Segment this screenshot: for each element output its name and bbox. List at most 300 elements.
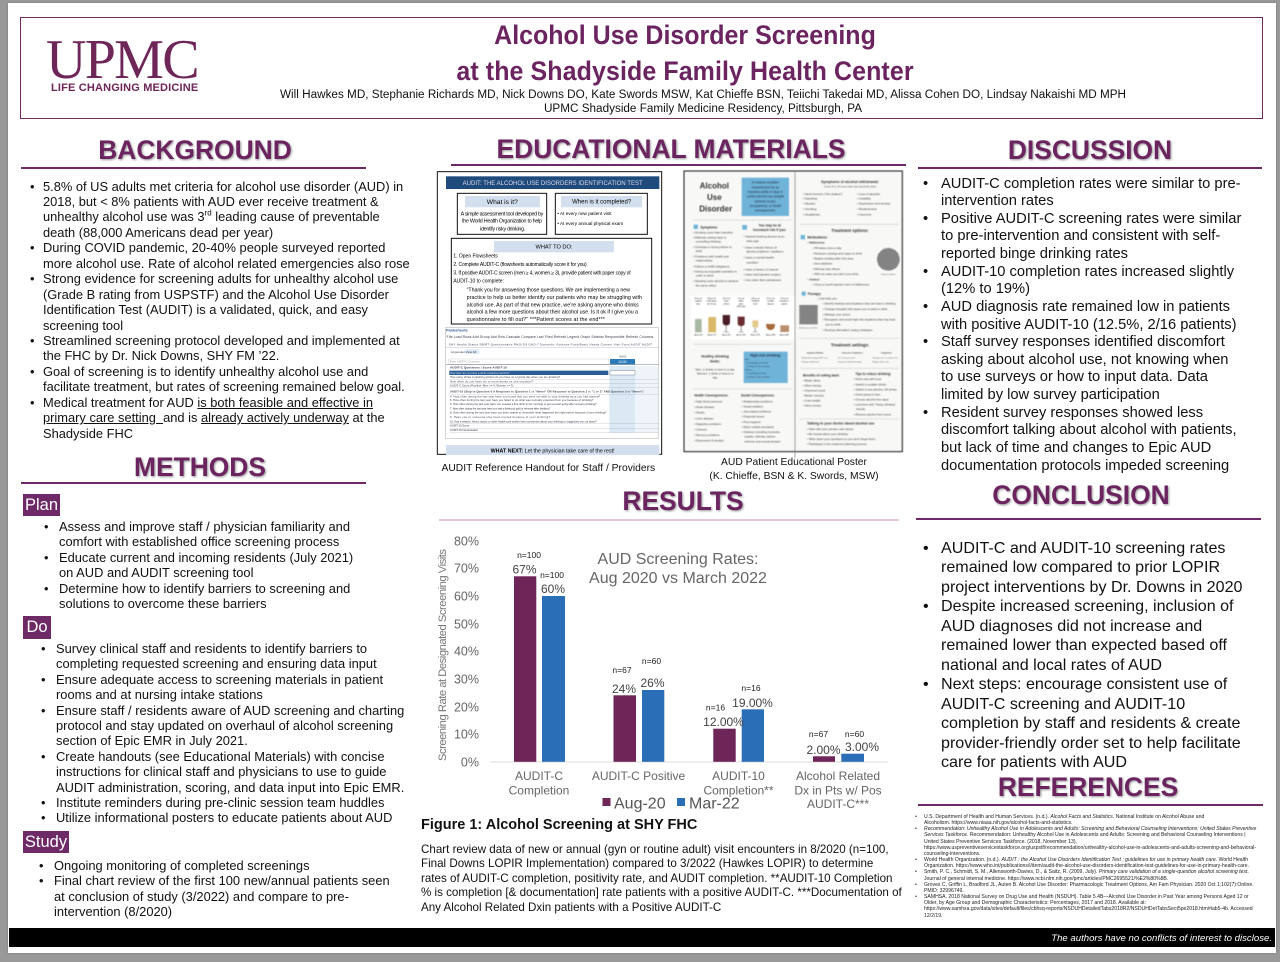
AUD patient educational poster: Benefits of cutting back: <box>803 374 840 378</box>
discussion bullets: with positive AUDIT-10 (12.5%, 2/16 patients) <box>941 316 1237 332</box>
AUD patient educational poster: • Sweating <box>803 197 818 201</box>
AUD patient educational poster: • Recognize and avoid high-risk situations that may lead <box>823 318 896 322</box>
title: at the Shadyside Family Health Center <box>456 56 914 86</box>
do bullets: Create handouts (see Educational Materials) with concise <box>56 749 384 764</box>
study bullets <box>40 858 390 919</box>
references list <box>915 814 1256 918</box>
AUDIT reference handout: How many drinks containing alcohol do you have on a typical day when you are drinking? <box>450 375 561 379</box>
do bullets: Ensure staff / residents aware of AUD screening and charting <box>56 703 404 718</box>
bar chart: 19.00% <box>732 696 773 710</box>
AUD patient educational poster: Disorder <box>699 205 732 214</box>
AUD patient educational poster: • Depression & anxiety <box>694 439 724 443</box>
AUD patient educational poster: • Giving up enjoyable activities in <box>693 270 737 274</box>
AUD patient educational poster: • Restlessness <box>857 207 877 211</box>
discussion bullets: AUDIT-10 completion rates increased slightly <box>941 264 1234 280</box>
AUD patient educational poster: spirits <box>781 302 788 305</box>
discussion bullets: asking about alcohol use, not knowing when <box>941 352 1228 368</box>
do bullets: Utilize informational posters to educate patients about AUD <box>56 810 392 825</box>
AUDIT reference handout: questionnaire to fill out?” ***Patient scores at the end*** <box>467 317 605 323</box>
AUD patient educational poster: Tips to reduce drinking: <box>855 372 891 376</box>
AUD patient educational poster: occupational, or health <box>749 204 781 208</box>
references list: Groves C, Griffin L, Bradford JL, Auten B. Alcohol Use Disorder: Pharmacologic Treatment Options. Am Fam Physician. 2020 Oct 1;102(7):Online. <box>924 882 1254 888</box>
AUD patient educational poster: beer <box>696 303 701 305</box>
AUDIT reference handout <box>436 171 662 455</box>
background bullets: unhealthy alcohol use was 3rd leading cause of preventable <box>43 209 380 224</box>
AUDIT reference handout: alcohol use. As part of that new practice, we’re asking anyone who drinks <box>467 302 639 308</box>
AUD patient educational poster: violence and sexual assault <box>744 439 780 443</box>
bar chart <box>437 534 888 812</box>
AUD patient educational poster: • Problems with health and <box>693 254 729 258</box>
references list: United States Preventive Services Taskforce. (2018, November 13). <box>924 839 1077 845</box>
AUDIT reference handout: alcohol a few more questions about their alcohol use. Is it ok if I give you a <box>467 310 638 316</box>
AUDIT reference handout: Expanded View All <box>451 350 476 354</box>
bar chart: n=60 <box>845 729 864 739</box>
tag: do <box>23 616 51 639</box>
AUDIT reference handout: • At every new patient visit <box>557 211 612 216</box>
AUD patient educational poster: • Relationship problems <box>742 399 773 403</box>
AUD patient educational poster: Symptoms of alcohol withdrawal: <box>821 180 879 184</box>
bar chart: n=67 <box>612 665 632 675</box>
bar chart: 60% <box>541 582 565 596</box>
AUD patient educational poster: • Non-addictive <box>813 262 833 266</box>
AUD patient educational poster: (12% alc) <box>737 306 746 308</box>
figure description: Chart review data of new or annual (gyn or routine adult) visit encounters in 8/2020 (n=100, <box>421 843 889 856</box>
AUD patient educational poster: 12 oz of <box>695 298 702 300</box>
AUD patient educational poster: Inpatient Rehab <box>807 352 824 355</box>
AUD patient educational poster: • Pill taken once a day <box>813 246 842 250</box>
AUD patient educational poster: drink <box>696 249 703 253</box>
study bullets: intervention (8/2020) <box>54 904 172 919</box>
AUD patient educational poster: Talking to your doctor about alcohol use <box>807 422 874 426</box>
do bullets: Survey clinical staff and residents to identify barriers to <box>56 641 367 656</box>
background bullets: Shadyside FHC <box>43 426 133 441</box>
authors and affiliation: Will Hawkes MD, Stephanie Richards MD, Nick Downs DO, Kate Swords MSW, Kat Chieffe BSN, Teiichi Takedai MD, Alissa Cohen DO, Lindsay Nakaishi MD MPH <box>280 88 1126 101</box>
conclusion bullets: remained low compared to prior LOPIR <box>941 558 1220 576</box>
AUD patient educational poster: • Limit time with "heavy drinking" <box>854 402 896 406</box>
bar chart: 0% <box>461 756 479 770</box>
bar chart: Completion <box>509 784 569 798</box>
background bullets: death (88,000 Americans dead per year) <box>43 225 273 240</box>
AUD patient educational poster: • Reduces cravings and urges to drink <box>813 251 862 255</box>
AUD patient educational poster: • Poor hygiene <box>742 420 761 424</box>
AUD patient educational poster: consequences. <box>755 209 776 213</box>
AUD patient educational poster: • Switch to low alcohol, NA drinks <box>854 387 897 391</box>
references list: https://www.uspreventiveservicestaskforce.org/uspstf/recommendation/unhealthy-alcohol-use-in-adolescents-and-adults-screening-and-behavioral- <box>924 845 1256 851</box>
AUDIT reference handout: File Load Rows Add Group Add Row Cascade Compare Last Filed Refresh Legend Graph Sidebar Responsible Refresh Columns <box>447 335 654 339</box>
references list: counseling-interventions. <box>924 851 981 857</box>
AUD patient educational poster: • Naltrexone <box>808 241 825 245</box>
do bullets: instructions for clinical staff and physicians to use to guide <box>56 764 386 779</box>
do bullets: rooms and at nursing intake stations <box>56 687 263 702</box>
AUDIT reference handout: 5. How often during the last year have you failed to do what was normally expected from you because of drinking? <box>450 398 594 402</box>
AUD patient educational poster: table <box>739 300 744 303</box>
AUD patient educational poster: • Can help you: <box>818 296 838 300</box>
do bullets: Institute reminders during pre-clinic session team huddles <box>56 795 384 810</box>
AUD patient educational poster: Manage withdrawal <box>802 360 819 363</box>
references list: U.S. Department of Health and Human Services. (n.d.). Alcohol Facts and Statistics. National Institute on Alcohol Abuse and <box>924 814 1204 820</box>
AUDIT reference handout: A simple assessment tool developed by <box>461 212 544 218</box>
background bullets: During COVID pandemic, 20-40% people surveyed reported <box>43 240 385 255</box>
AUD patient educational poster: brandy or <box>780 301 789 303</box>
background bullets <box>30 178 410 441</box>
AUDIT reference handout: AUDIT-10 (Skip to Question 9 if Response to Question 1 is "Never" OR Response to Question 2 is "1 or 2" AND Question 3 is "Never") <box>450 389 643 393</box>
AUD patient educational poster: you to drink <box>825 323 841 327</box>
AUD patient educational poster: Social Consequences: <box>741 394 775 398</box>
AUDIT reference handout: AUDIT-C Score (Positive: Men >= 4, Women >= 3) <box>450 383 513 387</box>
bar chart: n=100 <box>540 570 564 580</box>
AUD patient educational poster: 3+ drinks/day or 8+/wk <box>746 373 766 375</box>
conclusion bullets: project interventions by Dr. Downs in 2020 <box>941 578 1242 596</box>
AUD patient educational poster: • Memory problems <box>694 433 720 437</box>
do bullets: protocol and stay updated on overhaul of alcohol screening <box>56 718 393 733</box>
AUDIT reference handout: WHAT NEXT: Let the physician take care of the rest! <box>491 448 615 454</box>
bar chart: 24% <box>612 682 636 696</box>
AUDIT reference handout: AUDIT-10 to complete: <box>453 279 504 285</box>
AUD patient educational poster: • More energy <box>803 383 822 387</box>
AUD patient educational poster: control alcohol use despite <box>747 195 784 199</box>
tag: do: Do <box>26 618 48 636</box>
bar chart: n=16 <box>741 683 761 693</box>
references list: Smith, P. C., Schmidt, S. M., Allensworth-Davies, D., & Saitz, R. (2009, July). Primary care validation of a single-question alcohol screening test. <box>924 869 1249 875</box>
caption: poster: (K. Chieffe, BSN & K. Swords, MSW) <box>709 470 879 482</box>
AUD patient educational poster: relationships <box>696 258 713 262</box>
discussion bullets: but lack of time and changes to Epic AUD <box>941 440 1211 456</box>
AUDIT reference handout: AUDIT-C Questions / Score AUDIT-10 <box>450 366 507 370</box>
AUD patient educational poster: impaired ability to stop or <box>748 190 783 194</box>
AUDIT reference handout: practice to help us better identify our patients who may be struggling with <box>467 295 642 301</box>
AUD patient educational poster: • Failure to fulfill obligations <box>693 264 730 268</box>
AUD patient educational poster: • Improved mood <box>803 388 826 392</box>
references list: Older, by Age Group and Demographic Characteristics: Percentages, 2017 and 2018. Available at: <box>924 900 1146 906</box>
plan bullets: solutions to overcome these barriers <box>59 596 267 611</box>
AUD patient educational poster: • Choose alcohol free days <box>854 397 889 401</box>
chart legend <box>602 796 740 812</box>
AUD patient educational poster: 3-4 oz of <box>751 297 760 300</box>
plan bullets: Educate current and incoming residents (July 2021) <box>59 550 353 565</box>
AUD patient educational poster: the same effect <box>696 284 716 288</box>
AUD patient educational poster: (in 12 oz) <box>707 303 716 305</box>
AUD patient educational poster: • Use other illicit substances <box>744 278 782 282</box>
AUD patient educational poster: • Start with your primary care doctor <box>807 427 854 431</box>
discussion bullets: discomfort talking about alcohol with patients, <box>941 422 1237 438</box>
AUD patient educational poster: wine <box>753 303 758 305</box>
header panel <box>20 17 1263 119</box>
AUD patient educational poster: Medications: <box>807 236 828 240</box>
AUD patient educational poster: • Will not make you sick if you drink <box>813 272 859 276</box>
AUD patient educational poster: About 24% <box>766 334 776 337</box>
references list: Organization. https://www.who.int/publications/i/item/audit-the-alcohol-use-disorders-identification-test-guidelines-for-use-in-primary-health-care. <box>924 863 1249 869</box>
bar chart: 12.00% <box>703 715 744 729</box>
bar chart: AUDIT-C <box>515 769 563 783</box>
AUD patient educational poster: Therapy: <box>807 292 821 296</box>
figure description: rates of AUDIT-C completion, positivity rate, and AUDIT completion. **AUDIT-10 Completion <box>421 872 892 885</box>
UPMC logo: LIFE CHANGING MEDICINE <box>51 82 198 94</box>
bar chart: 2.00% <box>806 743 841 757</box>
discussion bullets: Staff survey responses identified discomfort <box>941 334 1225 350</box>
discussion bullets: AUD diagnosis rate remained low in patients <box>941 299 1230 315</box>
AUD patient educational poster: adverse social, <box>755 199 776 203</box>
bar chart: AUDIT-C Positive <box>592 769 685 783</box>
heading: results: RESULTS <box>622 486 744 516</box>
background bullets: Streamlined screening protocol developed and implemented at <box>43 333 400 348</box>
AUD patient educational poster: Treatment settings: <box>831 342 869 347</box>
AUD patient educational poster: • Difficulty cutting back or <box>693 236 727 240</box>
AUD patient educational poster: • Irritability <box>857 197 871 201</box>
AUD patient educational poster: 1.5 oz of <box>780 298 789 300</box>
AUD patient educational poster: • Minimal side effects <box>813 267 841 271</box>
bar chart: 3.00% <box>845 740 879 754</box>
AUD patient educational poster: condition <box>746 260 759 264</box>
discussion bullets: to pre-intervention and consistent with self- <box>941 228 1220 244</box>
AUDIT reference handout: the World Health Organization to help <box>462 218 542 224</box>
references list: Recommendation: Unhealthy Alcohol Use in Adolescents and Adults: Screening and Behavioral Counseling Interventions: United States Preventive <box>924 826 1256 832</box>
AUDIT reference handout: AUDIT: THE ALCOHOL USE DISORDERS IDENTIFICATION TEST <box>463 181 643 187</box>
AUDIT reference handout: 2. Complete AUDIT-C (flowsheets automatically score it for you) <box>453 262 587 268</box>
AUD patient educational poster: Regular office visit <box>872 360 889 363</box>
conclusion bullets: Despite increased screening, inclusion of <box>941 597 1234 615</box>
AUD patient educational poster: controlling drinking <box>696 240 721 244</box>
AUD patient educational poster: Health Consequences: <box>694 393 728 397</box>
discussion bullets: AUDIT-C completion rates were similar to pre- <box>941 176 1241 192</box>
AUD patient educational poster: • Be honest about your drinking <box>807 432 848 436</box>
bar chart: n=67 <box>809 729 828 739</box>
AUD patient educational poster: • Better sleep <box>803 378 821 382</box>
AUD patient educational poster: order to drink <box>696 274 714 278</box>
bar chart: 10% <box>454 728 479 742</box>
AUD patient educational poster: Occur 8 to 24 hours after last alcoholic drink <box>824 185 877 189</box>
AUD patient educational poster: Alcohol <box>700 181 729 190</box>
AUD patient educational poster: • Heart disease <box>694 405 715 409</box>
AUD patient educational poster: • Loss of appetite <box>857 192 880 196</box>
AUD patient educational poster: • Better memory <box>803 394 825 398</box>
study bullets: Ongoing monitoring of completed screenings <box>54 858 310 873</box>
AUD patient educational poster: 10+ hours per week <box>838 358 855 360</box>
AUDIT reference handout: 10:00 <box>618 360 627 364</box>
AUD patient educational poster: 5+ drinks on one occasion <box>746 366 770 368</box>
AUD patient educational poster: regular <box>695 301 702 303</box>
AUDIT reference handout: 9. Have you or someone else been injured because of your drinking? <box>450 415 551 419</box>
AUD patient educational poster <box>682 170 904 459</box>
background bullets: 2018, but < 8% patients with AUD ever receive treatment & <box>43 194 379 209</box>
AUD patient educational poster: Naltrexone website <box>799 326 818 329</box>
references list: Services Taskforce. Recommendation: Unhealthy Alcohol Use in Adolescents and Adults: Screening and Behavioral Counseling Interventions | <box>924 832 1246 838</box>
tag: plan: Plan <box>25 496 58 514</box>
AUD patient educational poster: About 5% <box>722 334 731 337</box>
AUD patient educational poster: 2-3 oz of <box>767 298 775 300</box>
background bullets: primary care setting and is already actively underway at the <box>43 410 385 425</box>
conclusion bullets: remained lower than expected based off <box>941 636 1227 654</box>
background bullets: Identification Test (AUDIT) is a validated, quick, and easy <box>43 302 368 317</box>
heading: references: REFERENCES <box>998 772 1178 802</box>
discussion bullets: reported binge drinking rates <box>941 246 1128 262</box>
caption: poster: AUD Patient Educational Poster <box>721 457 867 468</box>
AUDIT reference handout: AUDIT-10 Interpretation <box>450 428 479 432</box>
UPMC logo: UPMC <box>46 29 198 91</box>
AUDIT reference handout: Enter AUDIT-C Comment <box>450 360 480 364</box>
AUD patient educational poster: • Identify feelings and situations that can lead to drinking <box>823 302 896 306</box>
AUD patient educational poster: malt liquor <box>707 300 717 303</box>
authors and affiliation: UPMC Shadyside Family Medicine Residency, Pittsburgh, PA <box>544 102 862 114</box>
AUD patient educational poster: day <box>713 375 718 379</box>
figure description <box>421 843 902 914</box>
AUD patient educational poster: Men: <box>745 359 750 361</box>
heading: background: BACKGROUND <box>98 135 292 165</box>
AUD patient educational poster: friends <box>856 407 866 411</box>
AUDIT reference handout: When is it completed? <box>572 200 632 206</box>
bar chart: 60% <box>454 590 479 604</box>
heading: conclusion: CONCLUSION <box>992 480 1170 510</box>
AUD patient educational poster: 4+ drinks on one occasion <box>746 377 770 379</box>
AUD patient educational poster: • Develop alternative coping strategies <box>823 328 873 332</box>
plan bullets: Assess and improve staff / physician familiarity and <box>59 519 350 534</box>
AUD patient educational poster: Use <box>707 193 722 202</box>
AUD patient educational poster: • Job-related problems <box>742 410 771 414</box>
discussion bullets: Positive AUDIT-C screening rates were similar <box>941 211 1241 227</box>
discussion bullets: Resident survey responses showed less <box>941 405 1203 421</box>
figure description: Any Alcohol Related Dxin patients with a Positive AUDIT-C <box>421 901 721 914</box>
AUD patient educational poster: • Nausea <box>803 202 816 206</box>
conclusion bullets: AUD diagnoses did not increase and <box>941 617 1202 635</box>
AUD patient educational poster: • Have a mental health <box>744 256 774 260</box>
AUD patient educational poster: Therapy once a week or less <box>872 358 898 360</box>
background bullets: Strong evidence for screening adults for unhealthy alcohol use <box>43 271 398 286</box>
AUD patient educational poster: About 5% <box>694 334 703 337</box>
references list: 12/2/19. <box>924 912 942 918</box>
AUD patient educational poster: • Motor vehicle accidents <box>742 425 775 429</box>
AUD patient educational poster: • Vomiting <box>803 207 817 211</box>
caption: poster <box>709 457 879 482</box>
references list: https://www.samhsa.gov/data/sites/default/files/cbhsq-reports/NSDUHDetailedTabs2018R2/NSDUHDetTabsSect5pe2018.htm#tab5-4b. Accessed <box>924 906 1253 912</box>
AUD patient educational poster: • Digestive problems <box>694 422 722 426</box>
AUD patient educational poster: • Depression and anxiety <box>857 202 891 206</box>
AUD patient educational poster: Symptoms <box>700 225 717 229</box>
bar chart: n=100 <box>517 550 541 560</box>
conclusion bullets: provider-friendly order set to help facilitate <box>941 734 1241 752</box>
AUD patient educational poster: hard <box>724 301 729 303</box>
references list: SAMHSA. 2018 National Survey on Drug Use and Health (NSDUH). Table 5.4B—Alcohol Use Disorder in Past Year among Persons Aged 12 or <box>924 894 1249 900</box>
bar chart: AUDIT-C*** <box>807 797 869 811</box>
authors and affiliation <box>280 88 1126 114</box>
chart title <box>589 551 767 587</box>
AUD patient educational poster: • Have a family history of <box>744 245 777 249</box>
AUDIT reference handout: 4. How often during the last year have you found that you were not able to stop drinking once you had started? <box>450 394 601 398</box>
AUDIT reference handout: identify risky drinking. <box>480 226 525 232</box>
plan bullets: on AUD and AUDIT screening tool <box>59 565 253 580</box>
AUD patient educational poster: • Switch to smaller drinks <box>854 382 887 386</box>
AUD patient educational poster: characterized by an <box>752 185 779 189</box>
caption: AUDIT handout: AUDIT Reference Handout for Staff / Providers <box>442 463 655 474</box>
AUDIT reference handout: 10. Has a relative, friend, doctor or other health care worker been concerned about your drinking or suggested you cut down? <box>450 419 597 423</box>
AUD patient educational poster: liqueur <box>767 303 774 305</box>
AUD patient educational poster: • Violence including homicide, <box>742 430 781 434</box>
AUD patient educational poster: • More money <box>803 404 822 408</box>
AUD patient educational poster: • Drinking more than intended <box>693 231 733 235</box>
conclusion bullets: AUDIT-C and AUDIT-10 screening rates <box>941 539 1225 557</box>
bar chart: 20% <box>454 700 479 714</box>
AUD patient educational poster: • Lose weight <box>803 399 821 403</box>
do bullets: completing requested screening and ensuring data input <box>56 656 377 671</box>
AUD patient educational poster: • Remove alcohol from home <box>854 413 892 417</box>
AUD patient educational poster: early age <box>746 239 759 243</box>
do bullets: Ensure adequate access to screening materials in patient <box>56 672 383 687</box>
AUDIT reference handout: WHAT TO DO: <box>536 244 573 250</box>
AUDIT reference handout: • At every annual physical exam <box>557 221 623 226</box>
tag: study: Study <box>25 833 67 851</box>
background bullets: the FHC by Dr. Nick Downs, SHY FM ’22. <box>43 348 279 363</box>
plan bullets: Determine how to identify barriers to screening and <box>59 581 350 596</box>
AUD patient educational poster: Intensive Outpatient <box>842 352 863 355</box>
AUD patient educational poster: • Insomnia <box>857 212 871 216</box>
references list: Journal of general internal medicine. https://www.ncbi.nlm.nih.gov/pmc/articles/PMC2695521/%E2%80%8B. <box>924 876 1168 882</box>
bar chart: n=60 <box>642 656 661 666</box>
AUD patient educational poster: • High blood pressure <box>694 399 723 403</box>
AUD patient educational poster: • Vivitrol <box>808 278 820 282</box>
background bullets: more alcohol use. Rate of alcohol related emergencies also rose <box>43 256 410 271</box>
AUD patient educational poster: • Avoid going to bars <box>854 392 881 396</box>
AUDIT reference handout: 7. How often during the last year have you had a feeling of guilt or remorse after drinking? <box>450 406 551 410</box>
bar chart: 40% <box>454 644 479 658</box>
conclusion bullets <box>924 539 1242 771</box>
AUD patient educational poster: About 7% <box>707 334 716 337</box>
background bullets: Goal of screening is to identify unhealthy alcohol use and <box>43 364 368 379</box>
AUD patient educational poster: suicide, intimate partner <box>744 435 775 439</box>
discussion bullets: (12% to 19%) <box>941 281 1030 297</box>
title <box>456 20 914 86</box>
references list: Alcoholism. https://www.niaaa.nih.gov/alcohol-facts-and-statistics. <box>924 820 1073 826</box>
figure description: Final Downs LOPIR Implementation) compared to 3/2022 (Hawkes LOPIR) to determine <box>421 857 873 870</box>
bar chart: Completion** <box>703 784 774 798</box>
AUD patient educational poster: • Change thoughts that cause you to want to drink <box>823 307 888 311</box>
AUD patient educational poster: High-risk drinking: <box>750 353 781 357</box>
bar chart: 50% <box>454 618 479 632</box>
bar chart: 30% <box>454 672 479 686</box>
AUD patient educational poster: • Once a month injection form of Naltrexone <box>813 283 870 287</box>
background bullets: facilitate treatment, but rates of screening remained below goal. <box>43 379 405 394</box>
bar chart: 70% <box>454 562 479 576</box>
AUD patient educational poster: wine <box>739 303 744 305</box>
conclusion bullets: care for patients with AUD <box>941 753 1127 771</box>
conclusion bullets: completion by staff and residents & create <box>941 714 1240 732</box>
AUDIT reference handout: 6. How often during the last year have you needed a first drink in the morning to get yourself going after a heavy drinking? <box>450 402 597 406</box>
AUD patient educational poster: About 40% <box>780 334 789 337</box>
AUD patient educational poster: cordial, <box>767 301 775 303</box>
bar chart: 26% <box>640 676 665 690</box>
AUD patient educational poster: 5 oz of <box>738 298 744 300</box>
AUD patient educational poster: Women: 1 drink or less in a <box>697 371 733 375</box>
AUD patient educational poster: • Participate in the treatment planning process <box>807 442 867 446</box>
AUD patient educational poster: • Stroke <box>694 411 705 415</box>
AUD patient educational poster: • Started drinking alcohol at an <box>744 234 785 238</box>
AUD patient educational poster: You may be at <box>759 223 782 227</box>
title: Alcohol Use Disorder Screening <box>494 20 876 50</box>
AUD patient educational poster: About 12% <box>736 334 746 337</box>
AUD patient educational poster: Group & individual therapy <box>838 360 861 363</box>
bar chart: AUDIT-10 <box>712 769 765 783</box>
discussion bullets <box>924 176 1242 474</box>
discussion bullets: limited by low survey participation <box>941 387 1160 403</box>
AUD patient educational poster: seltzer <box>723 302 730 305</box>
figure caption: Figure 1: Alcohol Screening at SHY FHC <box>421 817 697 833</box>
AUD patient educational poster: Men: 2 drinks or less in a day <box>695 367 735 371</box>
chart legend: Mar-22 <box>689 796 740 812</box>
AUD patient educational poster: • Financial issues <box>742 415 765 419</box>
bar chart: n=16 <box>706 702 725 712</box>
AUD patient educational poster: alcohol problems / addiction <box>746 250 784 254</box>
AUD patient educational poster: Healthy drinking <box>701 355 729 359</box>
AUDIT reference handout: How often do you have a drink containing alcohol? <box>450 371 510 375</box>
AUD patient educational poster: • Manage your stress <box>823 312 851 316</box>
AUD patient educational poster: • Cravings or strong desire to <box>693 245 732 249</box>
